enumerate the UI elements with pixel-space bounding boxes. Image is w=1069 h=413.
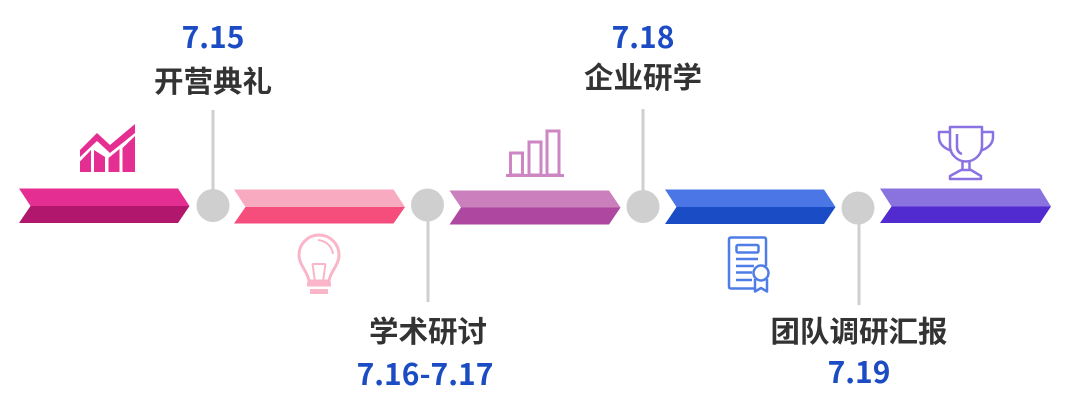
heading: team research report: 团队调研汇报 (770, 309, 948, 351)
heading: academic seminar: 学术研讨 (369, 309, 487, 351)
connector line 3 (642, 109, 644, 191)
icon: bar chart (506, 131, 564, 176)
milestone dot 4 (842, 192, 874, 224)
arrow segment 5: purple (880, 188, 1051, 223)
connector line 1 (212, 110, 214, 192)
connector line 4 (858, 222, 860, 305)
date: 7.19: 7.19 (828, 348, 890, 392)
date: 7.16-7.17: 7.16-7.17 (357, 350, 493, 394)
arrow segment 4: blue (665, 190, 836, 224)
connector line 2 (426, 220, 430, 302)
icon: trophy (939, 127, 993, 179)
icon: rising chart (80, 124, 135, 172)
icon: certificate (729, 238, 768, 292)
date: 7.15: 7.15 (182, 13, 244, 57)
heading: corporate study: 企业研学 (584, 55, 702, 97)
heading: opening ceremony: 开营典礼 (154, 59, 272, 101)
milestone dot 1 (196, 189, 230, 222)
icon: light bulb (299, 235, 339, 292)
arrow segment 3: orchid (450, 190, 620, 224)
date: 7.18: 7.18 (612, 13, 674, 57)
arrow segment 2: pink (234, 190, 405, 224)
milestone dot 3 (626, 190, 660, 223)
arrow segment 1: magenta (19, 188, 190, 223)
milestone dot 2 (411, 188, 444, 222)
